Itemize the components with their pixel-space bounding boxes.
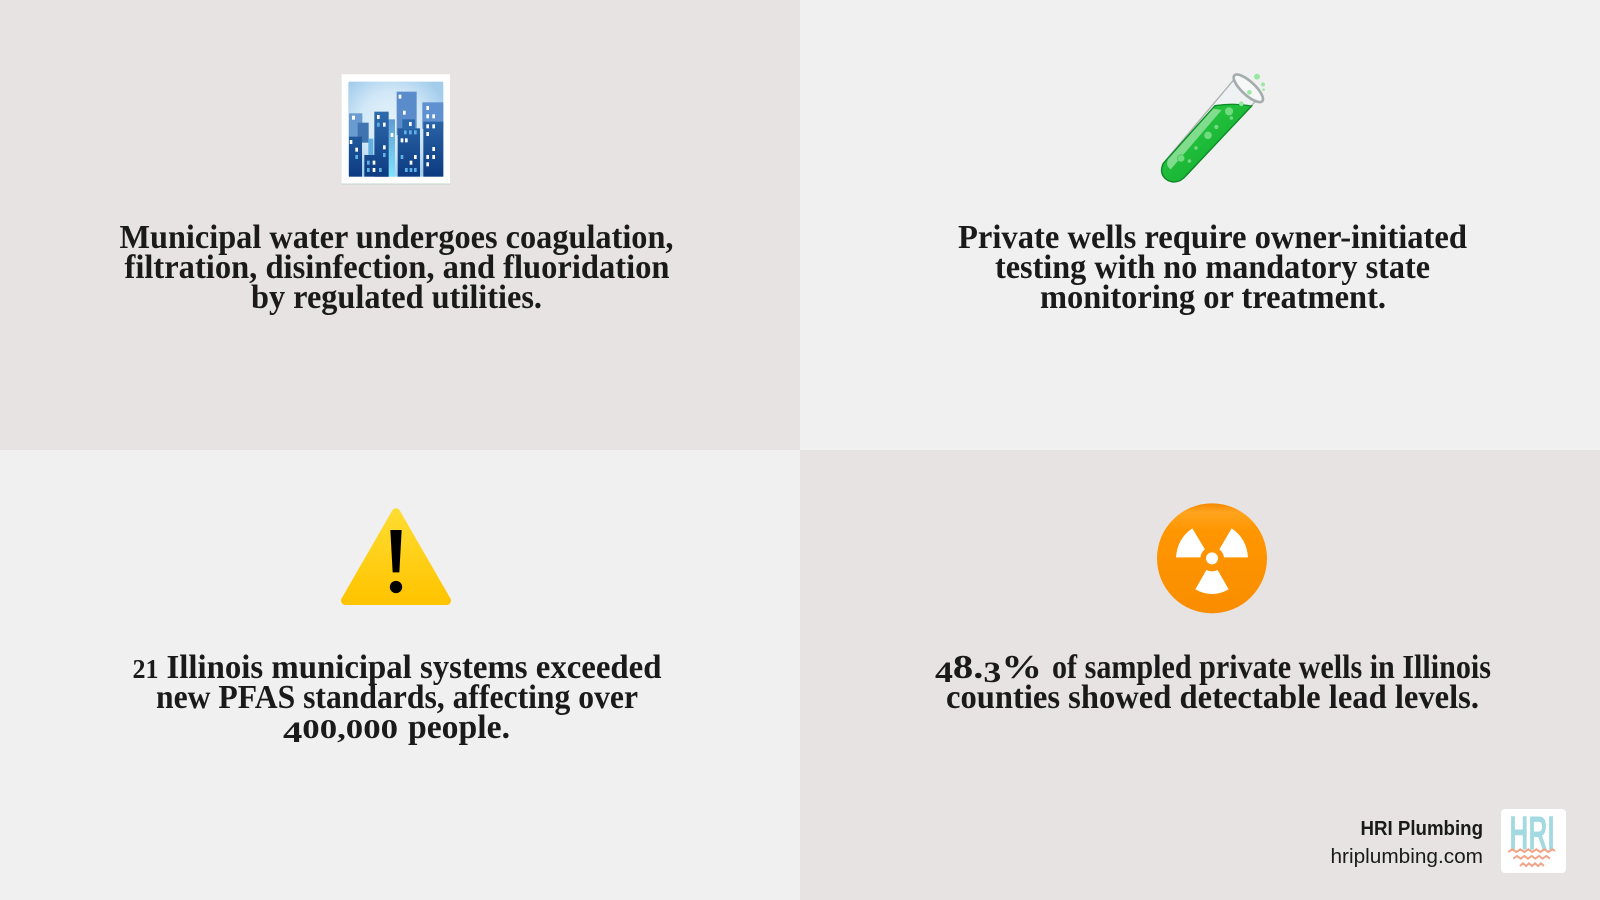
- icon: radioactive symbol: [1157, 503, 1267, 613]
- text: PFAS warning: Illinois municipal systems exceeded: [166, 649, 662, 686]
- text: lead detection: 8.: [953, 649, 983, 686]
- brand name and website: HRI Plumbing: [1360, 818, 1483, 840]
- text: lead detection: 3: [983, 656, 1001, 689]
- icon: cityscape: [342, 74, 450, 184]
- panel: municipal treatment: [0, 0, 800, 450]
- text: PFAS warning: [132, 649, 662, 749]
- panel: private well testing: [800, 0, 1600, 450]
- panel: lead detection: [800, 450, 1600, 900]
- text: private well testing: Private wells require owner-initiated: [958, 219, 1467, 256]
- text: PFAS warning: 21: [132, 654, 158, 684]
- text: lead detection: of sampled private wells in Illinois: [1052, 649, 1491, 686]
- text: PFAS warning: people.: [408, 709, 510, 746]
- text: private well testing: monitoring or treatment.: [1040, 279, 1386, 316]
- text: municipal treatment: filtration, disinfection, and fluoridation: [124, 249, 670, 286]
- text: private well testing: testing with no mandatory state: [995, 249, 1430, 286]
- text: municipal treatment: [120, 219, 674, 316]
- icon: test tube: [1161, 71, 1267, 182]
- icon: HRI logo: [1501, 808, 1566, 873]
- brand name and website: [1330, 818, 1483, 868]
- text: PFAS warning: 00,000: [302, 714, 398, 744]
- brand name and website: hriplumbing.com: [1330, 846, 1483, 868]
- text: lead detection: %: [1001, 649, 1042, 686]
- text: private well testing: [958, 219, 1467, 316]
- text: PFAS warning: new PFAS standards, affecting over: [156, 679, 638, 716]
- text: municipal treatment: by regulated utilities.: [251, 279, 542, 316]
- text: municipal treatment: Municipal water undergoes coagulation,: [120, 219, 674, 256]
- text: lead detection: [935, 649, 1491, 716]
- text: PFAS warning: 4: [283, 716, 302, 749]
- icon: HRI logo: HRI: [1509, 808, 1555, 861]
- text: lead detection: 4: [935, 656, 953, 689]
- icon: warning triangle: [345, 513, 447, 601]
- text: lead detection: counties showed detectable lead levels.: [946, 679, 1479, 716]
- panel: PFAS warning: [0, 450, 800, 900]
